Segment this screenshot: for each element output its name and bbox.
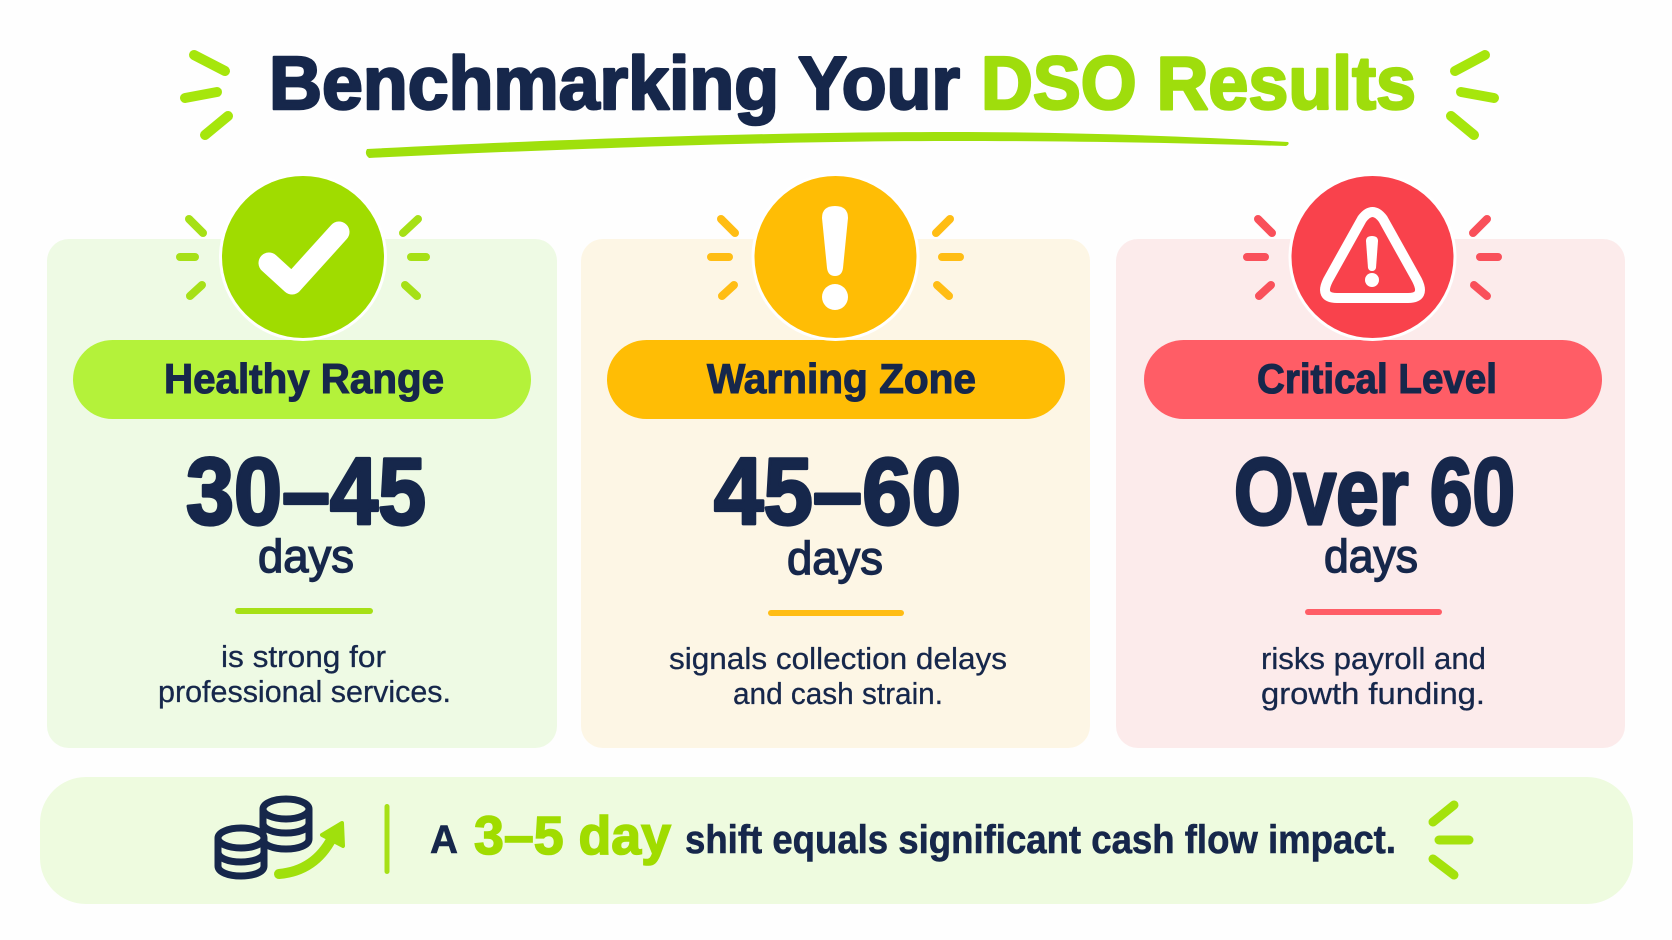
callout text: A — [430, 818, 458, 862]
label pill: Warning Zone — [707, 355, 976, 402]
panel: healthy range — [47, 173, 557, 748]
callout text — [430, 806, 1396, 866]
callout text: shift equals significant cash flow impact. — [685, 818, 1396, 862]
accent divider — [768, 610, 904, 616]
description — [158, 639, 451, 709]
label pill — [607, 340, 1065, 419]
rays — [1433, 805, 1469, 875]
icon: coins with arrow — [218, 799, 343, 876]
range value: 30–45 — [186, 439, 426, 545]
title: Benchmarking Your — [269, 41, 960, 125]
description: and cash strain. — [733, 676, 943, 711]
title — [269, 41, 1416, 125]
label pill: Critical Level — [1257, 355, 1497, 402]
label pill — [1144, 340, 1602, 419]
icon: warning triangle badge — [1247, 173, 1498, 341]
days unit: days — [258, 530, 354, 582]
band background — [40, 777, 1633, 904]
description: professional services. — [158, 674, 451, 709]
days unit: days — [1324, 530, 1418, 582]
title: DSO Results — [981, 41, 1416, 125]
title rays left — [185, 55, 228, 135]
vertical divider — [384, 804, 390, 874]
range value: Over 60 — [1234, 439, 1515, 545]
description — [669, 641, 1007, 711]
description — [1261, 641, 1486, 711]
accent divider — [1305, 609, 1442, 615]
callout band — [40, 777, 1633, 904]
title underline — [366, 132, 1289, 158]
card background — [47, 239, 557, 748]
description: risks payroll and — [1261, 641, 1486, 676]
icon: exclamation badge — [711, 173, 960, 341]
card background — [1116, 239, 1625, 748]
title rays right — [1451, 55, 1494, 135]
days unit: days — [787, 532, 883, 584]
callout text: 3–5 day — [474, 806, 671, 866]
icon: check badge — [180, 173, 426, 341]
label pill: Healthy Range — [164, 355, 444, 402]
accent divider — [235, 608, 373, 614]
description: growth funding. — [1261, 676, 1485, 711]
range value: 45–60 — [714, 439, 961, 545]
description: signals collection delays — [669, 641, 1007, 676]
description: is strong for — [221, 639, 386, 674]
panel: critical level — [1116, 173, 1625, 748]
label pill — [73, 340, 531, 419]
card background — [581, 239, 1090, 748]
panel: warning zone — [581, 173, 1090, 748]
